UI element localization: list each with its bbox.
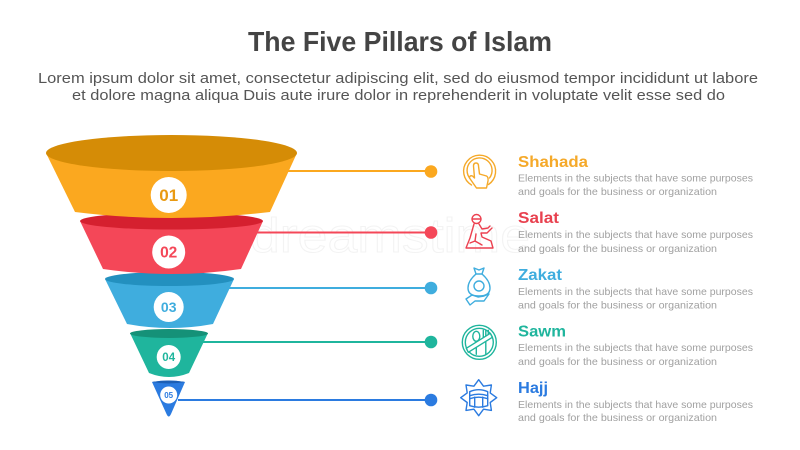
funnel layer 2: 02 <box>160 244 177 262</box>
funnel layer 3 <box>105 272 234 328</box>
funnel layer 3: 03 <box>161 299 177 315</box>
text block: Sawm: and goals for the business or organization <box>518 356 717 368</box>
icon: pointing hand in circle <box>464 155 496 188</box>
funnel layer 5 <box>152 380 185 416</box>
funnel layer 5: 05 <box>164 391 174 400</box>
watermark: dreamstime <box>250 210 530 263</box>
funnel <box>46 135 297 416</box>
text block: Shahada: Elements in the subjects that have some purposes <box>518 172 753 184</box>
text block: Sawm: Elements in the subjects that have some purposes <box>518 342 753 354</box>
connector line 2 <box>255 226 437 239</box>
text block: Shahada <box>518 154 753 198</box>
funnel layer 4: 04 <box>162 352 176 364</box>
funnel layer 1: 01 <box>159 186 178 205</box>
text block: Hajj <box>518 380 753 424</box>
text block: Salat: Elements in the subjects that have some purposes <box>518 229 753 241</box>
subtitle text <box>38 70 758 104</box>
text block: Hajj: Elements in the subjects that have some purposes <box>518 399 753 411</box>
connector line 5 <box>178 394 437 406</box>
funnel layer 2 <box>80 212 263 274</box>
text block: Shahada: Shahada <box>518 154 588 171</box>
text block: Salat <box>518 210 753 255</box>
text block: Sawm <box>518 324 753 368</box>
text block: Zakat: and goals for the business or organization <box>518 300 717 312</box>
text block: Sawm: Sawm <box>518 324 566 340</box>
text block: Hajj: Hajj <box>518 380 548 397</box>
connector line 1 <box>285 165 437 178</box>
icon: kaaba in star <box>461 380 497 416</box>
text block: Salat: Salat <box>518 210 560 227</box>
connector line 4 <box>203 336 437 348</box>
title: The Five Pillars of Islam <box>248 26 552 57</box>
subtitle text: Lorem ipsum dolor sit amet, consectetur adipiscing elit, sed do eiusmod tempor incididunt ut labore <box>38 70 758 87</box>
text block: Zakat: Zakat <box>518 267 563 284</box>
text block: Hajj: and goals for the business or organization <box>518 412 717 424</box>
text block: Zakat: Elements in the subjects that have some purposes <box>518 286 753 298</box>
icon: no food <box>462 325 496 359</box>
funnel layer 1 <box>46 135 297 218</box>
connector line 3 <box>228 282 437 294</box>
text block: Shahada: and goals for the business or organization <box>518 186 717 198</box>
icon: money bag on hand <box>466 268 490 305</box>
funnel layer 4 <box>130 329 208 377</box>
text block: Salat: and goals for the business or organization <box>518 243 717 255</box>
text block: Zakat <box>518 267 753 312</box>
icon: person praying <box>466 214 493 248</box>
subtitle text: et dolore magna aliqua Duis aute irure dolor in reprehenderit in voluptate velit esse sed do <box>72 87 725 104</box>
